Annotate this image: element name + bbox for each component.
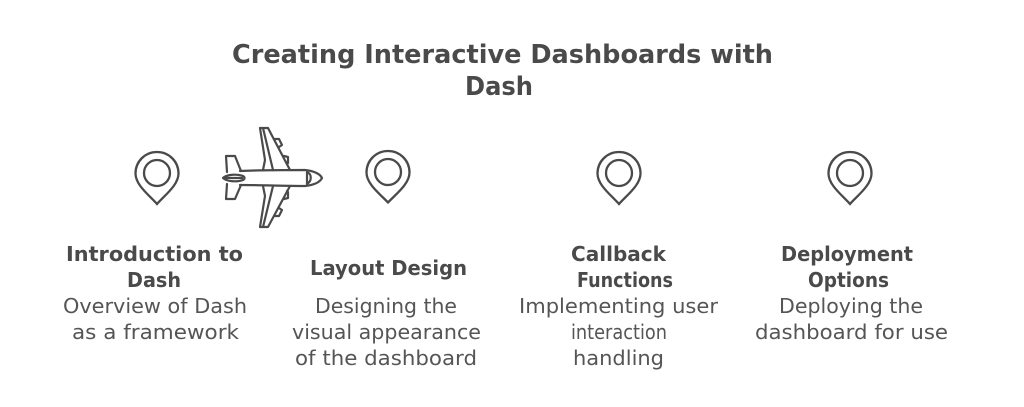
icon: map pin 1	[136, 152, 178, 204]
step 1: Introduction to Dash: Introduction to	[66, 242, 243, 266]
step 4: Deployment Options	[755, 242, 948, 344]
step 1: Introduction to Dash: Overview of Dash	[63, 294, 247, 318]
step 2: Layout Design	[292, 256, 481, 370]
step 3: Callback Functions: Functions	[577, 268, 673, 292]
step 3: Callback Functions: interaction	[571, 320, 667, 344]
step 3: Callback Functions: Implementing user	[519, 294, 719, 318]
step 4: Deployment Options: Deploying the	[779, 294, 923, 318]
title	[232, 40, 773, 102]
step 4: Deployment Options: Options	[808, 268, 889, 292]
step 1: Introduction to Dash: as a framework	[72, 320, 239, 344]
step 3: Callback Functions: Callback	[571, 242, 667, 266]
step 2: Layout Design: of the dashboard	[295, 346, 477, 370]
icon: map pin 4	[828, 152, 872, 204]
step 2: Layout Design: Designing the	[315, 294, 457, 318]
icon: map pin 2	[366, 151, 410, 202]
step 1: Introduction to Dash	[63, 242, 247, 344]
step 2: Layout Design: Layout Design	[310, 256, 467, 280]
step 3: Callback Functions	[519, 242, 719, 370]
step 1: Introduction to Dash: Dash	[127, 268, 181, 292]
icon: airplane	[223, 128, 322, 227]
title: Dash	[465, 72, 533, 102]
step 4: Deployment Options: dashboard for use	[755, 320, 948, 344]
step 3: Callback Functions: handling	[573, 346, 664, 370]
icon: map pin 3	[598, 152, 640, 204]
step 4: Deployment Options: Deployment	[781, 242, 913, 266]
step 2: Layout Design: visual appearance	[292, 320, 481, 344]
title: Creating Interactive Dashboards with	[232, 40, 773, 70]
